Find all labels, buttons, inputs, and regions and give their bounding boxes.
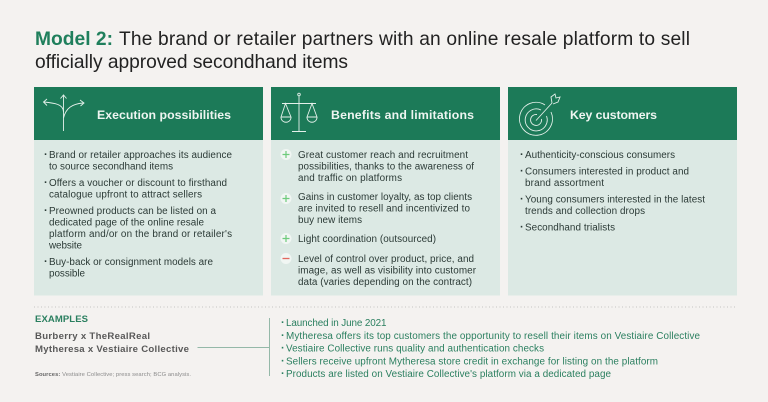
example details list	[281, 317, 700, 380]
execution possibilities list: ·	[44, 177, 48, 189]
example details list: ·	[281, 356, 285, 368]
key customers list: trends and collection drops	[525, 206, 645, 217]
benefits and limitations list	[280, 149, 477, 288]
icon: scales	[281, 93, 317, 132]
title: officially approved secondhand items	[35, 52, 348, 73]
execution possibilities list: to source secondhand items	[49, 162, 173, 172]
example details list: Launched in June 2021	[286, 318, 387, 329]
title	[35, 29, 690, 73]
heading: key customers: Key customers	[570, 108, 657, 122]
panel: execution possibilities	[34, 87, 263, 296]
execution possibilities list: platform and/or on the brand or retailer's	[49, 229, 232, 240]
title: Model 2:	[35, 29, 113, 50]
icon: target	[519, 94, 560, 135]
execution possibilities list	[44, 149, 232, 280]
key customers list: Secondhand trialists	[525, 222, 615, 234]
example details list: Vestiaire Collective runs quality and authentication checks	[286, 344, 544, 354]
benefits and limitations list: are invited to resell and incentivized to	[298, 204, 470, 214]
execution possibilities list: ·	[44, 149, 48, 161]
icon: plus	[280, 233, 292, 244]
panel: key customers	[508, 87, 737, 296]
key customers list: brand assortment	[525, 178, 604, 189]
key customers list	[520, 149, 705, 234]
key customers list: ·	[520, 166, 524, 178]
heading: execution possibilities: Execution possibilities	[97, 108, 231, 122]
example details list: Products are listed on Vestiaire Collective's platform via a dedicated page	[286, 369, 612, 380]
examples block: Mytheresa x Vestiaire Collective	[35, 344, 189, 355]
icon: plus	[280, 149, 292, 160]
execution possibilities list: catalogue upfront to attract sellers	[49, 190, 202, 200]
icon: diverging arrows	[44, 95, 84, 131]
examples block: Burberry x TheRealReal	[35, 331, 150, 342]
execution possibilities list: Buy-back or consignment models are	[49, 257, 214, 268]
key customers list: ·	[520, 149, 524, 161]
title: The brand or retailer partners with an online resale platform to sell	[119, 29, 690, 50]
execution possibilities list: Preowned products can be listed on a	[49, 206, 216, 217]
execution possibilities list: ·	[44, 256, 48, 268]
example details list: Sellers receive upfront Mytheresa store credit in exchange for listing on the platform	[286, 356, 658, 368]
execution possibilities list: possible	[49, 268, 86, 280]
example details list: ·	[281, 330, 285, 342]
benefits and limitations list: and traffic on platforms	[298, 173, 402, 184]
key customers list: Authenticity-conscious consumers	[525, 150, 675, 161]
icon: minus	[280, 253, 292, 264]
heading: benefits and limitations: Benefits and limitations	[331, 108, 474, 122]
key customers list: Consumers interested in product and	[525, 166, 689, 178]
example details list: ·	[281, 368, 285, 380]
icon: plus	[280, 193, 292, 204]
connector	[198, 318, 270, 376]
benefits and limitations list: Gains in customer loyalty, as top clients	[298, 192, 472, 203]
key customers list: Young consumers interested in the latest	[525, 194, 705, 206]
benefits and limitations list: possibilities, thanks to the awareness of	[298, 162, 474, 172]
execution possibilities list: Offers a voucher or discount to firsthand	[49, 178, 227, 189]
example details list: Mytheresa offers its top customers the opportunity to resell their items on Vestiaire Collective	[286, 331, 700, 342]
example details list: ·	[281, 317, 285, 329]
panel: benefits and limitations	[271, 87, 500, 296]
execution possibilities list: dedicated page of the online resale	[49, 218, 204, 228]
execution possibilities list: Brand or retailer approaches its audience	[49, 150, 232, 161]
benefits and limitations list: Light coordination (outsourced)	[298, 234, 436, 245]
execution possibilities list: website	[48, 240, 82, 252]
key customers list: ·	[520, 194, 524, 206]
benefits and limitations list: buy new items	[298, 215, 362, 226]
benefits and limitations list: Level of control over product, price, and	[298, 254, 474, 265]
benefits and limitations list: data (varies depending on the contract)	[298, 277, 472, 288]
execution possibilities list: ·	[44, 205, 48, 217]
example details list: ·	[281, 342, 285, 354]
sources: Sources: Vestiaire Collective; press search; BCG analysis.	[35, 372, 191, 378]
examples block	[35, 314, 189, 355]
key customers list: ·	[520, 222, 524, 234]
examples block: EXAMPLES	[35, 314, 88, 325]
benefits and limitations list: Great customer reach and recruitment	[298, 150, 468, 161]
benefits and limitations list: image, as well as visibility into customer	[298, 266, 477, 276]
